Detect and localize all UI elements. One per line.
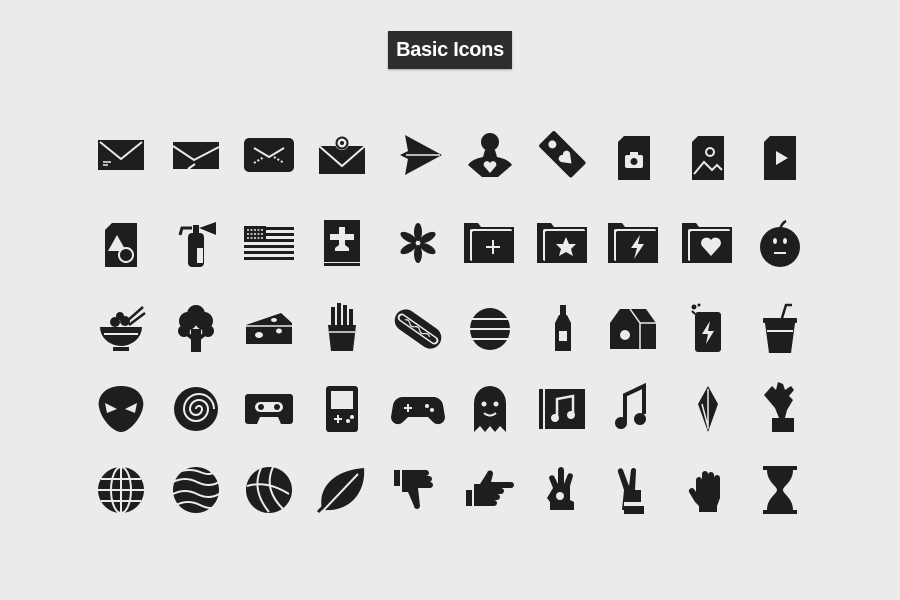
icon: milk carton xyxy=(610,309,656,349)
icon: flag xyxy=(244,226,294,260)
icon: leaf xyxy=(318,468,364,514)
icon: peace hand xyxy=(618,468,644,514)
icon: cheese xyxy=(246,313,292,344)
icon: globe xyxy=(98,467,144,513)
icon: ghost xyxy=(474,386,506,432)
icon: paper plane xyxy=(400,135,442,175)
icon: gameboy xyxy=(326,386,358,432)
icon: file image xyxy=(692,136,724,180)
icon: folder heart xyxy=(682,223,732,263)
icon: fire extinguisher xyxy=(180,222,216,267)
icon: music note xyxy=(615,386,646,429)
icon: tag heart xyxy=(538,130,586,178)
icon: email at xyxy=(319,136,365,174)
icon: ball xyxy=(246,467,292,513)
icon: cup straw xyxy=(763,305,797,353)
icon: envelope rounded xyxy=(244,138,294,172)
icon: cassette xyxy=(245,394,293,424)
icon: raised hand xyxy=(689,471,720,512)
icon: hourglass xyxy=(763,466,797,514)
icon: broccoli xyxy=(178,305,214,352)
icon: gamepad xyxy=(391,397,445,424)
title: Basic Icons xyxy=(396,39,504,61)
icon: file play xyxy=(764,136,796,180)
icon: flower xyxy=(399,223,437,263)
icon: bottle xyxy=(555,305,571,351)
icon: thumbs down xyxy=(394,470,433,509)
icon: envelope open xyxy=(173,142,219,169)
icon: thumbs up xyxy=(466,470,514,506)
title xyxy=(388,31,512,69)
icon: file shapes xyxy=(105,223,137,267)
icon: fries xyxy=(328,303,356,351)
icon: envelope xyxy=(98,140,144,170)
icon: noodle bowl xyxy=(100,307,145,351)
icon: book plane xyxy=(324,220,360,266)
icon: hotdog xyxy=(390,305,446,353)
icon: folder star xyxy=(537,223,587,263)
icon: folder lightning xyxy=(608,223,658,263)
icon: folder plus xyxy=(464,223,514,263)
icon: apple xyxy=(760,221,800,267)
icon: striped planet xyxy=(173,467,219,513)
icon: crystal xyxy=(698,386,718,432)
icon: zombie hand xyxy=(764,382,794,432)
icon: spiral xyxy=(174,387,218,431)
icon: file camera xyxy=(618,136,650,180)
icon: music album xyxy=(539,389,585,429)
icon: person heart xyxy=(468,133,512,177)
icon: hand ok xyxy=(547,467,574,510)
icon: alien xyxy=(99,386,143,432)
icon: energy can xyxy=(692,304,721,352)
icon: barrel xyxy=(470,308,510,350)
